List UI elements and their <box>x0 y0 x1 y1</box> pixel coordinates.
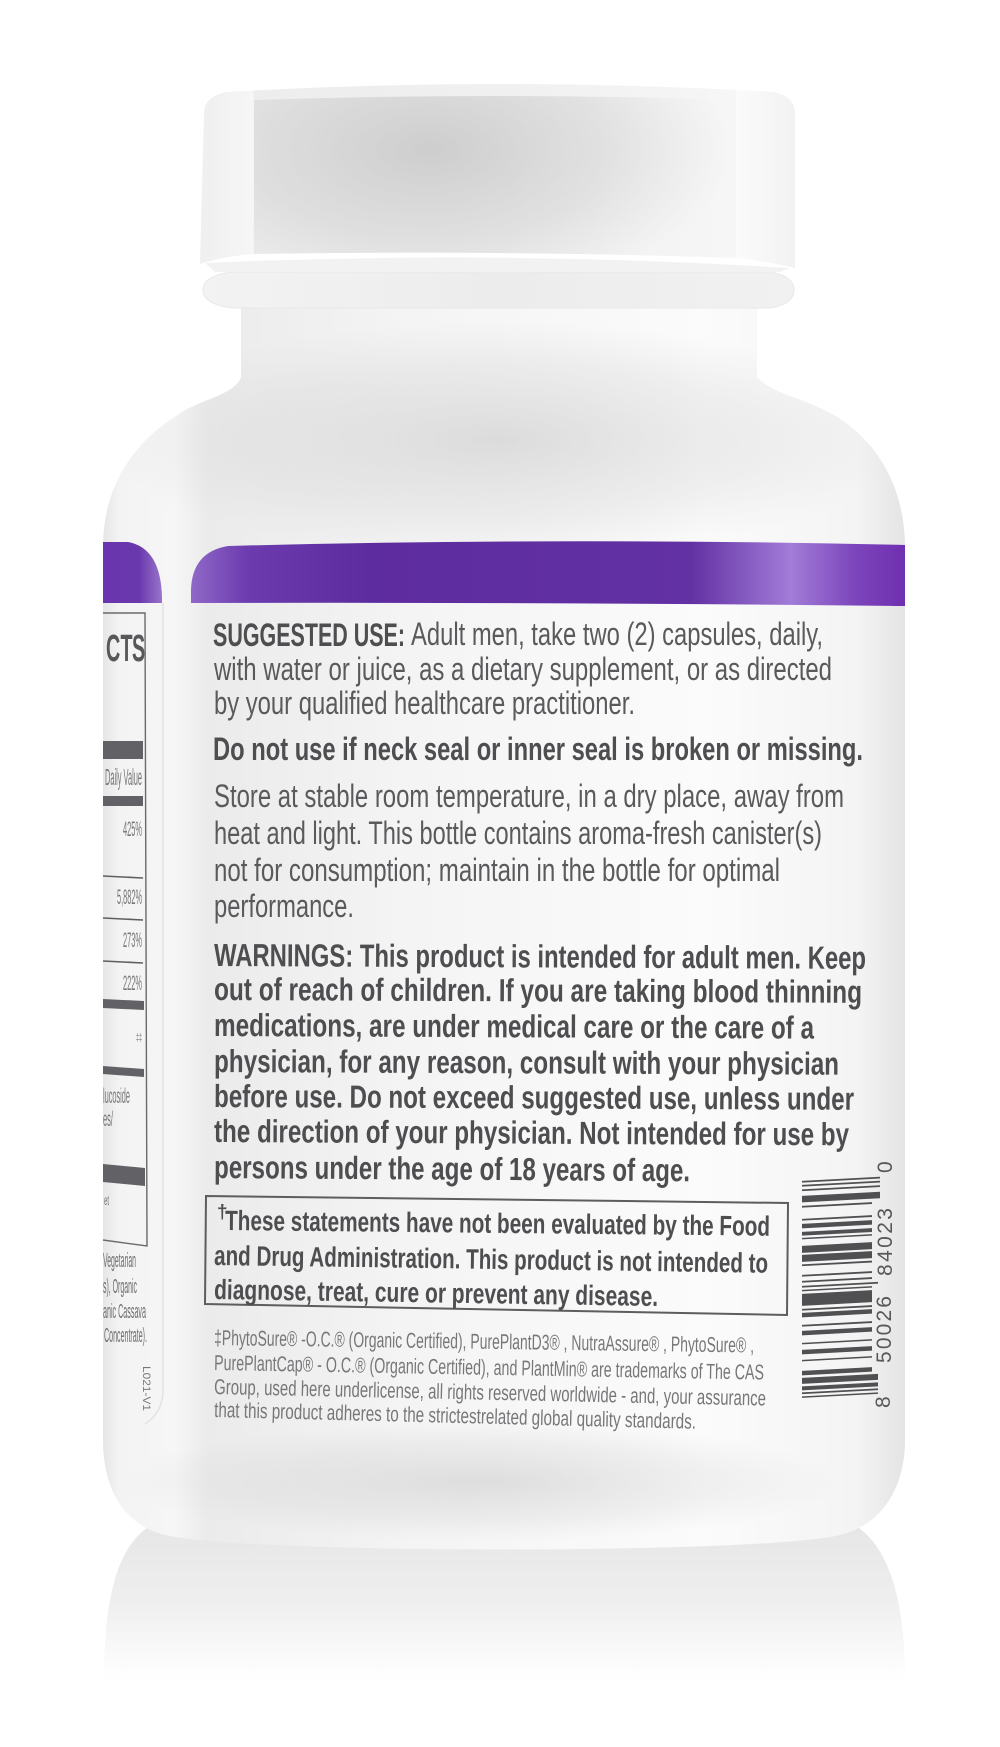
panel: nutrition facts (wrapped side of label): 273% <box>123 929 142 952</box>
text: suggested use: by your qualified healthcare practitioner. <box>214 685 635 721</box>
barcode digits: 84023 <box>874 1208 897 1276</box>
callout: FDA disclaimer box: † <box>217 1202 228 1223</box>
panel: nutrition facts (wrapped side of label): s), Organic <box>103 1276 137 1298</box>
infographic: bottle back label <box>102 84 905 1640</box>
barcode digits: 50026 <box>873 1296 896 1363</box>
panel: nutrition facts (wrapped side of label): es/ <box>103 1108 113 1131</box>
text: warnings <box>214 937 866 1188</box>
floor reflection <box>104 1526 905 1680</box>
text: storage <box>214 778 844 924</box>
infographic: bottle back label: Concentrate). <box>104 1325 147 1347</box>
barcode digits: 8 <box>872 1396 895 1408</box>
panel: nutrition facts (wrapped side of label): 5,882% <box>117 886 142 909</box>
text: suggested use: SUGGESTED USE: <box>213 617 405 653</box>
barcode <box>802 1161 897 1408</box>
callout: FDA disclaimer box <box>205 1196 788 1315</box>
lot code: L021-V1 <box>140 1366 152 1411</box>
base shading <box>255 1440 740 1524</box>
cap inner lip <box>205 258 790 272</box>
thick rule <box>103 796 143 806</box>
panel: nutrition facts (wrapped side of label) <box>103 542 163 1424</box>
infographic: bottle back label: anic Cassava <box>103 1301 146 1323</box>
text: trademark footnote: Group, used here underlicense, all rights reserved worldwide - and, your assurance <box>214 1375 766 1411</box>
barcode digits <box>872 1161 897 1408</box>
text: trademark footnote <box>214 1326 766 1434</box>
label seam <box>145 603 163 1424</box>
panel: nutrition facts (wrapped side of label): lucoside <box>103 1085 130 1108</box>
panel: nutrition facts (wrapped side of label): et <box>104 1192 109 1208</box>
callout: FDA disclaimer box: diagnose, treat, cure or prevent any disease. <box>214 1274 658 1312</box>
cap <box>200 84 795 268</box>
panel: nutrition facts (wrapped side of label): Vegetarian <box>103 1250 136 1272</box>
purple header, side panel <box>103 542 162 603</box>
thick rule <box>103 999 144 1010</box>
cap shading <box>254 96 738 258</box>
barcode digits: 0 <box>874 1161 897 1173</box>
text: trademark footnote: that this product adheres to the strictestrelated global quality standards. <box>214 1398 696 1434</box>
panel: nutrition facts (wrapped side of label): Daily Value <box>105 764 142 790</box>
thick rule <box>103 1164 145 1186</box>
bottle <box>100 84 905 1550</box>
neck ring <box>203 272 794 308</box>
barcode bars <box>802 1177 880 1398</box>
panel: nutrition facts (wrapped side of label): 222% <box>123 972 142 995</box>
facts frame <box>103 613 147 1246</box>
text: storage: not for consumption; maintain in the bottle for optimal <box>214 852 780 888</box>
heading fragment: CTS <box>106 628 145 670</box>
other ingredients <box>103 1250 147 1347</box>
bottle body <box>103 300 905 1550</box>
thick rule <box>103 1066 144 1077</box>
text: warnings: medications, are under medical care or the care of a <box>214 1007 814 1046</box>
panel: nutrition facts (wrapped side of label): 425% <box>123 818 142 841</box>
callout: FDA disclaimer box: These statements have not been evaluated by the Food <box>225 1205 770 1242</box>
text: storage: performance. <box>214 888 354 924</box>
shoulder shading <box>100 320 900 1542</box>
panel: purple header band <box>191 541 905 606</box>
text: suggested use <box>213 616 832 721</box>
text: suggested use: Adult men, take two (2) capsules, daily, <box>411 616 823 652</box>
text: warnings: persons under the age of 18 years of age. <box>214 1149 690 1188</box>
callout: FDA disclaimer box: and Drug Administration. This product is not intended to <box>214 1240 768 1279</box>
thick rule <box>103 741 143 759</box>
panel: nutrition facts (wrapped side of label): ‡‡ <box>136 1032 142 1044</box>
